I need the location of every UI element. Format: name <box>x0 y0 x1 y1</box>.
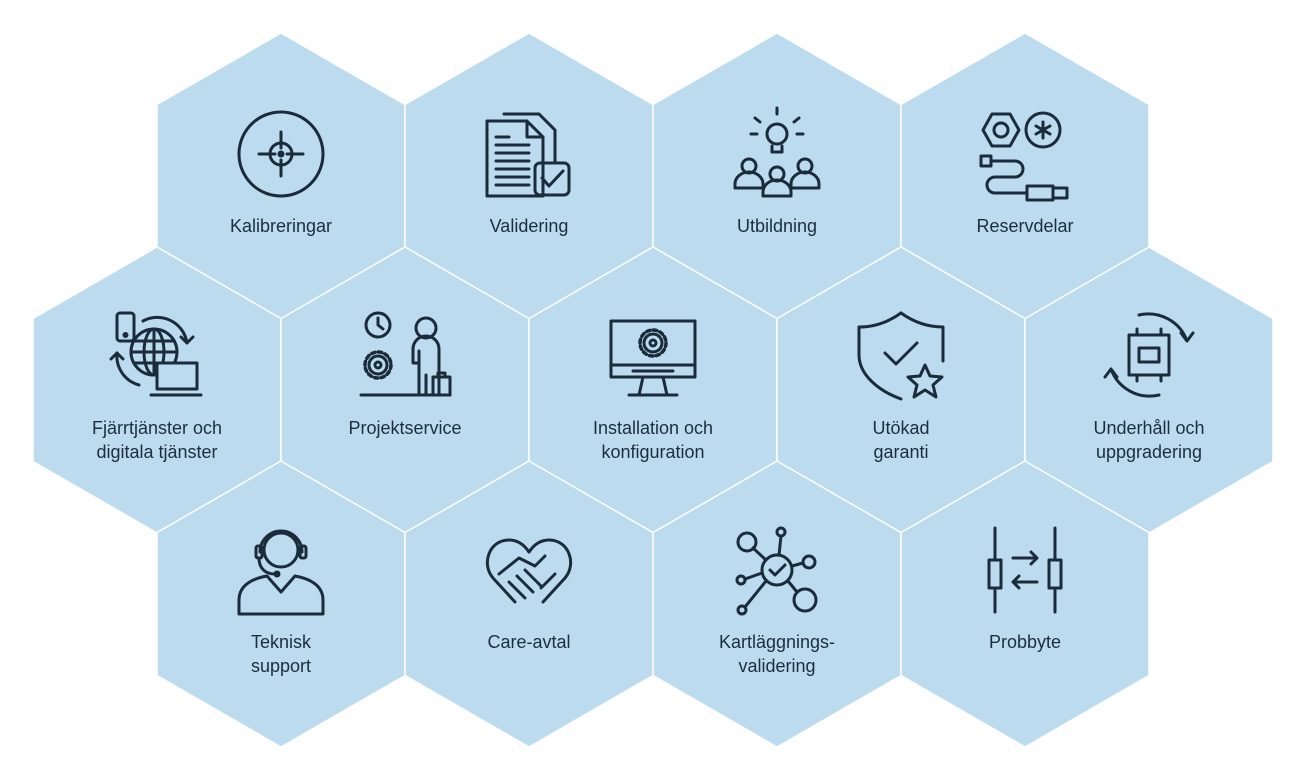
label: Fjärrtjänster och <box>92 418 222 438</box>
hex: Underhåll: uppgradering <box>1096 442 1202 462</box>
icon: remote services <box>111 313 201 395</box>
icon: support headset <box>239 531 323 614</box>
label: Validering <box>490 216 568 236</box>
icon: shield star <box>859 313 943 399</box>
label: Kalibreringar <box>230 216 332 236</box>
hex: Fjärrtjänster <box>33 247 281 533</box>
hex: Fjärrtjänster: digitala tjänster <box>96 442 218 462</box>
hex: Utbildning <box>653 33 901 319</box>
label: Teknisk <box>251 632 312 652</box>
hex: Installation <box>529 247 777 533</box>
icon: network check <box>737 528 816 614</box>
icon: heart handshake <box>487 540 571 602</box>
label: Probbyte <box>989 632 1061 652</box>
hex: Projektservice <box>281 247 529 533</box>
hex: Probbyte <box>901 461 1149 747</box>
hex: Underhåll <box>1025 247 1273 533</box>
label: Kartläggnings- <box>719 632 835 652</box>
label: Utökad <box>872 418 930 438</box>
hex: Reservdelar <box>901 33 1149 319</box>
hex: Kalibreringar <box>157 33 405 319</box>
hex: Care-avtal <box>405 461 653 747</box>
hex: Teknisk support: support <box>251 656 311 676</box>
hex: Teknisk support <box>157 461 405 747</box>
label: Reservdelar <box>976 216 1074 236</box>
hex: Kartläggningsvalidering: validering <box>738 656 816 676</box>
hex: Installation: konfiguration <box>601 442 705 462</box>
icon: crosshair <box>239 112 323 196</box>
icon: spare parts <box>981 113 1067 200</box>
hex: Kartläggningsvalidering <box>653 461 901 747</box>
label: Underhåll och <box>1093 418 1205 438</box>
icon: probe exchange <box>989 528 1061 612</box>
label: Care-avtal <box>487 632 571 652</box>
icon: chip cycle <box>1105 314 1193 396</box>
label: Utbildning <box>737 216 817 236</box>
hex: Utökad garanti <box>777 247 1025 533</box>
icon: documents <box>487 114 569 196</box>
icon: monitor gear <box>611 321 695 395</box>
label: Projektservice <box>348 418 462 438</box>
icon: project person <box>361 313 450 395</box>
hex: Utökad garanti: garanti <box>873 442 929 462</box>
label: Installation och <box>593 418 713 438</box>
icon: people with lightbulb <box>735 108 819 196</box>
hex: Validering <box>405 33 653 319</box>
